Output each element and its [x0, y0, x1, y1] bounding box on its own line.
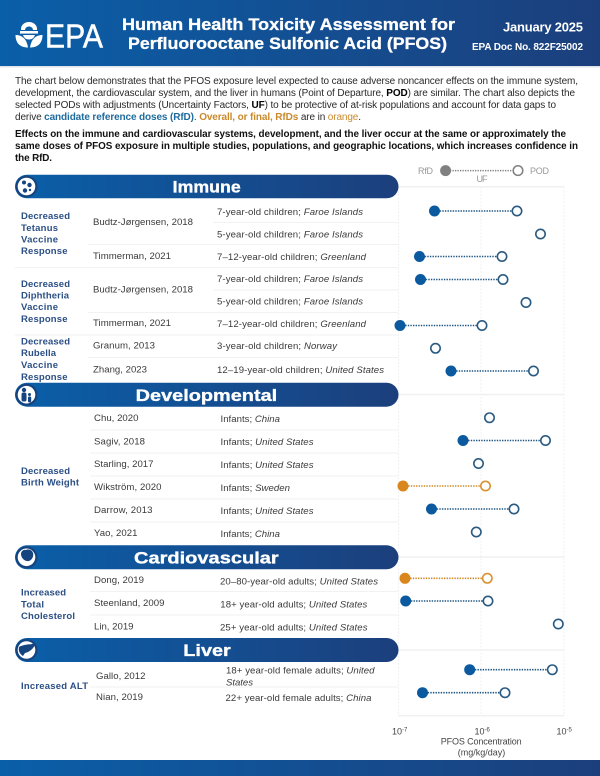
- diphtheria studies: Budtz-Jørgensen, 2018: [93, 284, 193, 296]
- liver studies: 22+ year-old female adults; China: [226, 693, 372, 704]
- intro paragraph: development, the cardiovascular system, and the liver in humans (Point of Departure, POD) are similar. The chart also depicts the: [15, 88, 575, 99]
- tetanus label: Decreased: [21, 211, 70, 222]
- diphtheria studies: 7-year-old children; Faroe Islands: [217, 274, 363, 285]
- diphtheria studies: 5-year-old children; Faroe Islands: [217, 296, 363, 308]
- panel: liver: [15, 638, 557, 704]
- birth weight studies: Chu, 2020: [94, 413, 138, 424]
- liver studies: Gallo, 2012: [96, 671, 146, 682]
- rubella studies: 12–19-year-old children; United States: [217, 365, 384, 376]
- cholesterol studies: 25+ year-old adults; United States: [220, 622, 368, 634]
- rubella studies: 3-year-old children; Norway: [217, 341, 338, 352]
- date: January 2025: [503, 20, 583, 34]
- cholesterol label: Cholesterol: [21, 611, 75, 622]
- dot plot: liver: [417, 664, 557, 698]
- panel: immune: [15, 175, 545, 383]
- x axis labels: -7: [402, 728, 408, 734]
- birth weight studies: Infants; United States: [220, 460, 314, 471]
- birth weight label: Decreased: [21, 466, 70, 477]
- document number: EPA Doc No. 822F25002: [472, 42, 583, 53]
- liver studies: 18+ year-old female adults; United: [226, 666, 375, 676]
- chart legend: RfD: [418, 166, 434, 176]
- rubella studies: Zhang, 2023: [93, 364, 147, 376]
- dot plot: cardiovascular: [400, 573, 563, 629]
- diphtheria label: Response: [21, 314, 68, 325]
- tetanus studies: Budtz-Jørgensen, 2018: [93, 217, 193, 228]
- rubella label: Rubella: [21, 348, 57, 359]
- tetanus label: Vaccine: [21, 234, 58, 246]
- chart legend: POD: [530, 166, 550, 176]
- heading: immune: Immune: [173, 178, 241, 197]
- rubella label: [21, 336, 70, 383]
- birth weight studies: Sagiv, 2018: [94, 436, 145, 448]
- title: [122, 16, 456, 53]
- heading: developmental: [15, 383, 398, 407]
- cholesterol studies: 18+ year-old adults; United States: [220, 600, 368, 610]
- birth weight studies: [94, 413, 314, 540]
- rubella studies: Granum, 2013: [93, 340, 155, 352]
- birth weight studies: Wikström, 2020: [94, 482, 162, 493]
- birth weight studies: Darrow, 2013: [94, 505, 152, 516]
- x axis labels: -6: [485, 728, 491, 734]
- icon: EPA logo: [16, 18, 103, 54]
- key finding statement: the RfD.: [15, 153, 52, 164]
- heading: liver: [15, 638, 398, 662]
- intro paragraph: The chart below demonstrates that the PFOS exposure level expected to cause adverse noncancer effects on the immune system,: [15, 76, 578, 87]
- birth weight studies: Starling, 2017: [94, 459, 154, 470]
- diphtheria studies: Timmerman, 2021: [93, 318, 171, 329]
- x axis labels: 10: [556, 726, 567, 736]
- birth weight label: Birth Weight: [21, 478, 80, 488]
- diphtheria studies: [93, 274, 367, 330]
- panel: developmental: [15, 383, 550, 540]
- tetanus label: Tetanus: [21, 223, 58, 234]
- cholesterol label: Total: [21, 600, 44, 610]
- rubella label: Response: [21, 372, 68, 383]
- x axis labels: 10: [474, 726, 485, 736]
- x axis labels: (mg/kg/day): [458, 748, 505, 758]
- key finding statement: [15, 129, 578, 164]
- title: Perfluorooctane Sulfonic Acid (PFOS): [128, 35, 447, 53]
- tetanus label: Response: [21, 246, 68, 257]
- x axis labels: -5: [567, 728, 573, 734]
- heading: developmental: Developmental: [136, 386, 277, 405]
- x axis labels: [392, 726, 573, 758]
- cholesterol studies: Lin, 2019: [94, 622, 134, 632]
- dot plot: developmental: [398, 413, 550, 537]
- x axis labels: PFOS Concentration: [441, 736, 522, 746]
- intro paragraph: [15, 76, 578, 123]
- diphtheria label: Vaccine: [21, 302, 58, 313]
- rubella label: Vaccine: [21, 360, 58, 371]
- intro paragraph: derive candidate reference doses (RfD). Overall, or final, RfDs are in orange.: [15, 112, 361, 123]
- cholesterol label: Increased: [21, 588, 66, 598]
- heading: cardiovascular: [15, 545, 398, 569]
- liver studies: Nian, 2019: [96, 692, 143, 703]
- tetanus studies: 7–12-year-old children; Greenland: [217, 252, 367, 263]
- footer band: [0, 760, 600, 776]
- rubella studies: [93, 340, 384, 376]
- chart legend: [418, 165, 550, 184]
- diphtheria label: Decreased: [21, 279, 70, 290]
- icon: EPA logo: EPA: [45, 18, 103, 54]
- rubella label: Decreased: [21, 336, 70, 348]
- diphtheria studies: 7–12-year-old children; Greenland: [217, 319, 367, 330]
- key finding statement: Effects on the immune and cardiovascular systems, development, and the liver occur at the same or approximately the: [15, 129, 566, 140]
- intro paragraph: selected PODs with adjustments (Uncertainty Factors, UF) to be protective of at-risk populations and account for data gaps to: [15, 100, 556, 111]
- header banner: [0, 0, 600, 68]
- cholesterol studies: [94, 575, 378, 634]
- heading: cardiovascular: Cardiovascular: [134, 548, 279, 568]
- cholesterol label: [21, 588, 75, 622]
- tetanus studies: 5-year-old children; Faroe Islands: [217, 230, 363, 240]
- tetanus studies: [93, 207, 367, 263]
- heading: immune: [15, 175, 398, 198]
- cholesterol studies: 20–80-year-old adults; United States: [220, 576, 378, 588]
- birth weight studies: Infants; United States: [220, 437, 314, 448]
- birth weight studies: Infants; China: [220, 414, 280, 425]
- birth weight studies: Infants; United States: [220, 506, 314, 517]
- title: Human Health Toxicity Assessment for: [122, 16, 456, 34]
- birth weight studies: Infants; China: [220, 529, 280, 540]
- chart legend: UF: [476, 174, 488, 184]
- liver studies: [96, 666, 375, 704]
- heading: liver: Liver: [183, 641, 231, 660]
- dot plot: immune: [394, 206, 545, 376]
- birth weight studies: Yao, 2021: [94, 528, 138, 539]
- cholesterol studies: Steenland, 2009: [94, 598, 164, 609]
- tetanus label: [21, 211, 70, 257]
- birth weight label: [21, 466, 80, 488]
- tetanus studies: Timmerman, 2021: [93, 251, 171, 262]
- tetanus studies: 7-year-old children; Faroe Islands: [217, 207, 363, 218]
- ALT label: Increased ALT: [21, 681, 88, 692]
- cholesterol studies: Dong, 2019: [94, 575, 144, 586]
- panel: cardiovascular: [15, 545, 563, 634]
- chart grid: [398, 187, 564, 716]
- birth weight studies: Infants; Sweden: [220, 483, 290, 494]
- diphtheria label: [21, 279, 70, 325]
- liver studies: States: [226, 678, 253, 688]
- x axis labels: 10: [392, 726, 402, 736]
- key finding statement: same doses of PFOS exposure in multiple studies, populations, and geographic locations, which increases confidence in: [15, 141, 578, 152]
- diphtheria label: Diphtheria: [21, 290, 70, 302]
- table row dividers: [15, 222, 398, 687]
